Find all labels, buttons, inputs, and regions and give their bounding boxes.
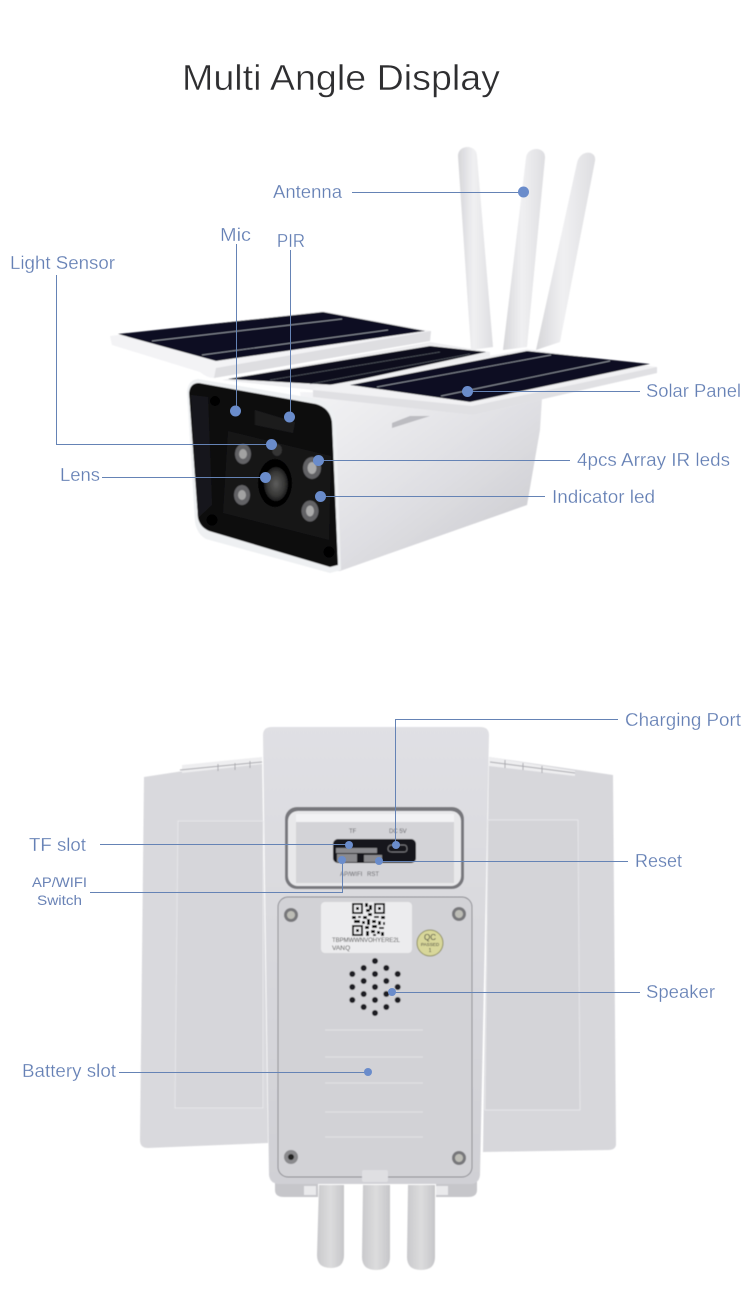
clip (362, 1170, 388, 1182)
lower bracket (275, 1180, 477, 1197)
main body (263, 727, 489, 1184)
callout: Charging Port: Charging Port (625, 710, 741, 730)
callout: Indicator led: Indicator led (552, 487, 655, 507)
QR label sticker: VANQ (332, 945, 350, 952)
callout: Solar Panel: Solar Panel (646, 381, 741, 401)
rear solar panel (222, 342, 490, 392)
port recess (285, 807, 464, 889)
battery door (278, 897, 472, 1182)
screws (206, 396, 334, 558)
rear view camera photo (140, 727, 616, 1270)
callout: Lens: Lens (60, 465, 100, 485)
callout: Light Sensor (10, 253, 277, 450)
callout: 4pcs Array IR leds: 4pcs Array IR leds (577, 450, 730, 470)
callout: AP/WIFI Switch: AP/WIFI (32, 874, 87, 890)
port opening (333, 839, 416, 863)
callout: TF slot (29, 835, 353, 855)
light sensor (272, 444, 282, 456)
callout: Antenna: Antenna (273, 182, 343, 202)
callout: PIR: PIR (277, 231, 305, 251)
antenna stubs (317, 1185, 435, 1270)
LED board (223, 431, 331, 540)
PIR window (255, 410, 295, 433)
camera front face (189, 383, 338, 567)
callout: Battery slot (22, 1061, 372, 1081)
callout: PIR (277, 231, 305, 422)
callout: Reset: Reset (635, 851, 682, 871)
front view camera photo (110, 147, 657, 573)
callout: Charging Port (392, 710, 741, 849)
QC passed sticker: PASSED (421, 942, 440, 947)
port recess: RST (367, 872, 379, 878)
battery ribs (325, 1030, 423, 1137)
callout: Antenna (273, 182, 529, 202)
callout: AP/WIFI Switch: Switch (37, 892, 82, 908)
QR code (352, 903, 385, 936)
callout: Lens (60, 465, 271, 485)
QC passed sticker (417, 930, 443, 956)
right solar panel (313, 349, 657, 415)
screws (284, 907, 466, 1165)
port labels: TF (349, 829, 357, 835)
callout: TF slot: TF slot (29, 835, 86, 855)
callout: 4pcs Array IR leds (313, 450, 730, 470)
right wing panel (483, 757, 616, 1152)
camera front shell (187, 379, 341, 573)
callout: Battery slot: Battery slot (22, 1061, 116, 1081)
port recess: DC 5V (389, 829, 407, 835)
QC passed sticker: QC (424, 933, 436, 942)
callout: Speaker (388, 982, 715, 1002)
speaker holes (349, 958, 401, 1016)
callout: Mic (220, 225, 251, 416)
callout: Light Sensor: Light Sensor (10, 253, 115, 273)
callout: Indicator led (315, 487, 655, 507)
callout: Mic: Mic (220, 225, 251, 245)
port recess: AP/WIFI (340, 872, 363, 878)
sticker text: TBPMWWNVOHYERE2L (332, 937, 400, 944)
left wing panel (140, 757, 268, 1148)
QC passed sticker: 1 (429, 948, 432, 954)
callout: Reset (375, 851, 682, 871)
callout: Solar Panel (462, 381, 741, 401)
callout: AP/WIFI Switch (32, 856, 346, 908)
antennas (458, 147, 595, 350)
title: Multi Angle Display (182, 57, 500, 98)
QR label sticker (321, 902, 412, 953)
IR leds (234, 444, 321, 522)
callout: Speaker: Speaker (646, 982, 715, 1002)
panel bracket (392, 416, 430, 428)
camera body side (300, 392, 542, 571)
left solar panel (110, 311, 431, 378)
lens (258, 459, 292, 507)
